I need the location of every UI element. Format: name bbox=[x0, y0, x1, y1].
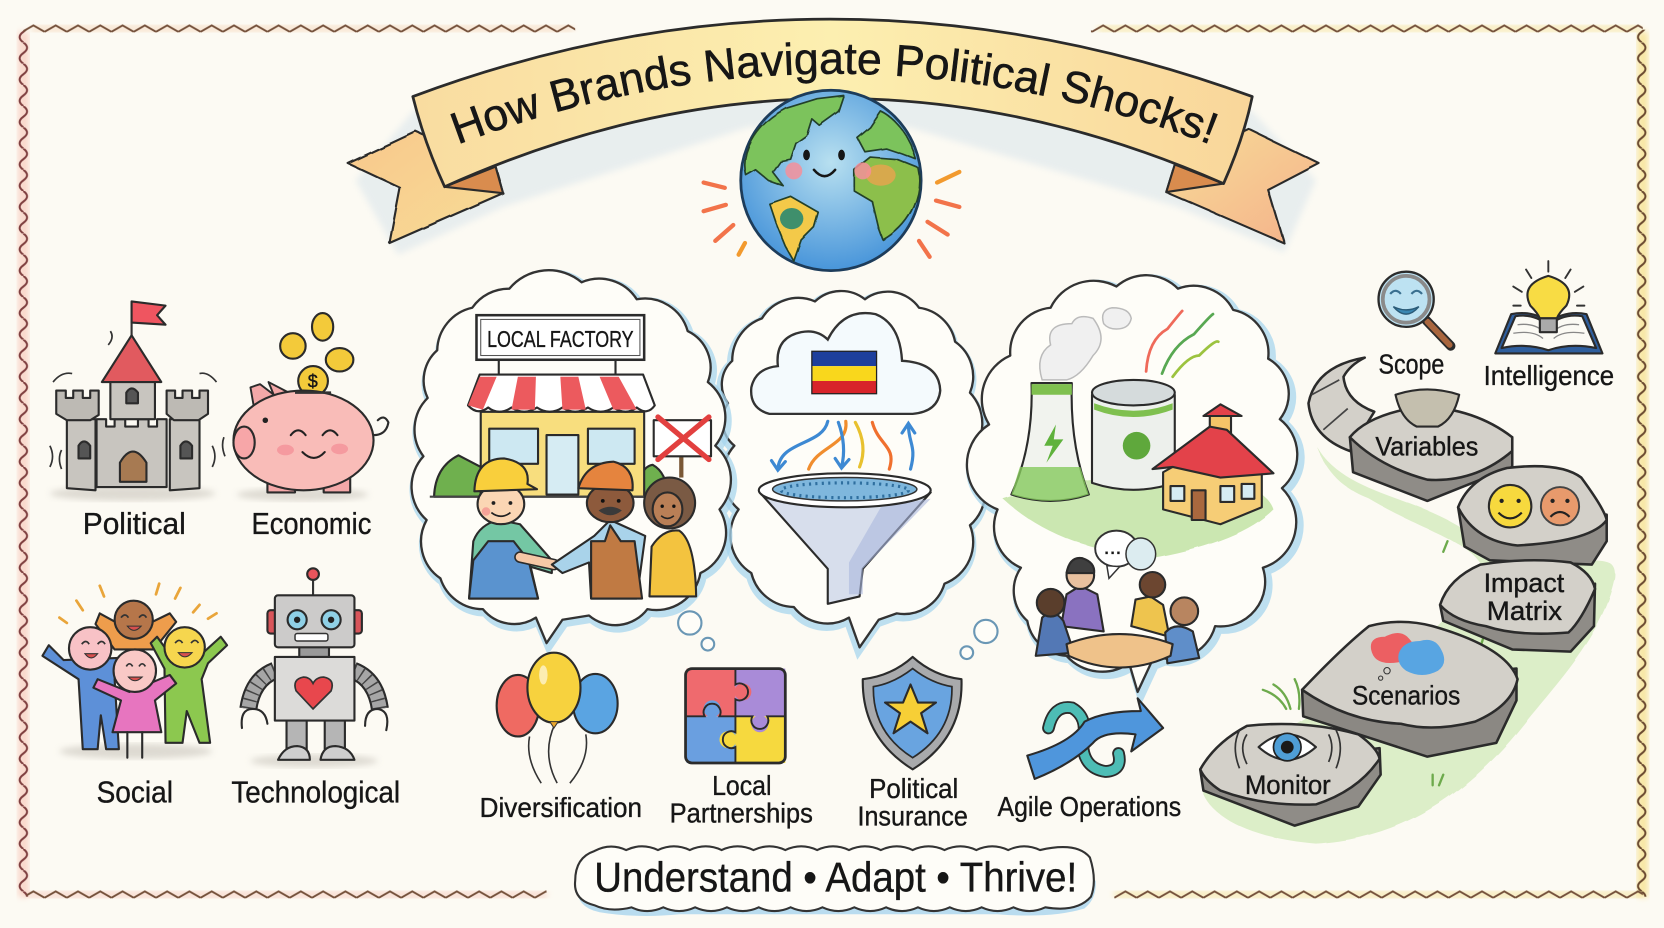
icon: happy face bbox=[1489, 485, 1531, 527]
handshake people bbox=[469, 458, 696, 599]
stone: sentiment bbox=[1458, 466, 1607, 565]
meeting around table: ... bbox=[1104, 536, 1121, 559]
stone: impact matrix: Impact bbox=[1484, 568, 1565, 598]
stone: impact matrix: Matrix bbox=[1487, 596, 1562, 626]
label: Political bbox=[83, 506, 186, 541]
stone: variables: Variables bbox=[1375, 431, 1478, 461]
banner shadow bbox=[356, 40, 1316, 255]
house bbox=[1152, 404, 1273, 524]
label: Political bbox=[869, 773, 958, 804]
wavy falling arrows bbox=[772, 421, 915, 470]
label: Insurance bbox=[857, 801, 968, 832]
cooling tower bbox=[1011, 383, 1089, 501]
icon: agile arrows bbox=[1027, 698, 1163, 779]
title banner bbox=[346, 18, 1320, 254]
icon: shield bbox=[863, 657, 962, 769]
label: Partnerships bbox=[670, 797, 813, 828]
icon: piggy bank bbox=[233, 313, 388, 501]
left ribbon tail bbox=[348, 132, 503, 243]
panel: thought dots, left bbox=[678, 611, 714, 651]
icon: magnifying glass bbox=[1379, 272, 1451, 346]
grass tufts bbox=[1263, 541, 1486, 785]
icon: eye bbox=[1235, 730, 1340, 768]
panel: right thought cloud, sustainability and meeting bbox=[967, 275, 1300, 695]
ribbon main band bbox=[413, 19, 1252, 187]
local factory sign: LOCAL FACTORY bbox=[487, 326, 634, 352]
panel: PEST factors bbox=[42, 301, 400, 809]
icon: piggy bank: $ bbox=[308, 371, 318, 391]
label: Local bbox=[712, 770, 772, 801]
curved path end bbox=[1308, 358, 1374, 451]
label: intelligence: Intelligence bbox=[1484, 360, 1614, 391]
stone: monitor bbox=[1200, 724, 1381, 826]
continents bbox=[745, 96, 919, 261]
stone: monitor: Monitor bbox=[1245, 770, 1331, 800]
icon: cheering people bbox=[42, 584, 227, 759]
icon: thought clouds bbox=[1371, 633, 1444, 680]
label: Social bbox=[97, 774, 173, 809]
green tank bbox=[1092, 380, 1175, 490]
shop building bbox=[430, 375, 679, 497]
inner cloud bbox=[751, 313, 940, 414]
smoke bbox=[1040, 317, 1101, 380]
stone: impact matrix bbox=[1440, 560, 1595, 652]
coloured emission lines bbox=[1146, 311, 1218, 377]
icon: sieve bbox=[1396, 389, 1459, 427]
icon: shaking castle bbox=[50, 301, 225, 501]
callout: closing slogan: Understand • Adapt • Thrive! bbox=[594, 854, 1077, 900]
panel: left thought cloud, localisation bbox=[412, 270, 733, 646]
stone: scenarios: Scenarios bbox=[1352, 681, 1460, 711]
grass ground bbox=[1202, 446, 1615, 844]
icon: light bulb over book bbox=[1495, 261, 1602, 353]
flag in cloud bbox=[812, 351, 877, 394]
label: scope: Scope bbox=[1379, 349, 1444, 380]
stone: variables bbox=[1350, 389, 1512, 501]
icon: robot with heart bbox=[242, 568, 387, 767]
label: Technological bbox=[231, 774, 400, 809]
icon: balloons bbox=[497, 653, 618, 783]
icon: puzzle bbox=[686, 669, 785, 763]
local factory sign bbox=[476, 315, 644, 378]
panel: thought dots, right bbox=[960, 620, 998, 659]
label bbox=[857, 773, 968, 832]
worker with orange cap and apron bbox=[552, 520, 645, 599]
right ribbon tail bbox=[1166, 129, 1319, 243]
icon: sad face bbox=[1541, 487, 1579, 525]
grass field bbox=[1003, 478, 1273, 557]
label: Economic bbox=[252, 506, 371, 541]
woman bbox=[644, 478, 695, 528]
label bbox=[670, 770, 813, 828]
globe face bbox=[785, 162, 802, 179]
funnel bbox=[759, 473, 931, 604]
sun rays bbox=[704, 172, 959, 257]
banner title text: How Brands Navigate Political Shocks! bbox=[450, 42, 1218, 144]
meeting around table bbox=[1036, 531, 1199, 668]
panel: centre thought cloud, filtering bbox=[721, 291, 985, 651]
label: Diversification bbox=[480, 792, 642, 823]
icon: smiling globe bbox=[704, 90, 959, 271]
callout: closing slogan bbox=[575, 846, 1094, 912]
crossed-out sign bbox=[654, 417, 711, 478]
label: Agile Operations bbox=[998, 791, 1181, 822]
panel: strategy icons bbox=[480, 653, 1181, 832]
worker with yellow hard hat bbox=[469, 520, 552, 599]
panel: stepping-stone path bbox=[1200, 358, 1615, 844]
stone: scenarios bbox=[1302, 622, 1518, 757]
